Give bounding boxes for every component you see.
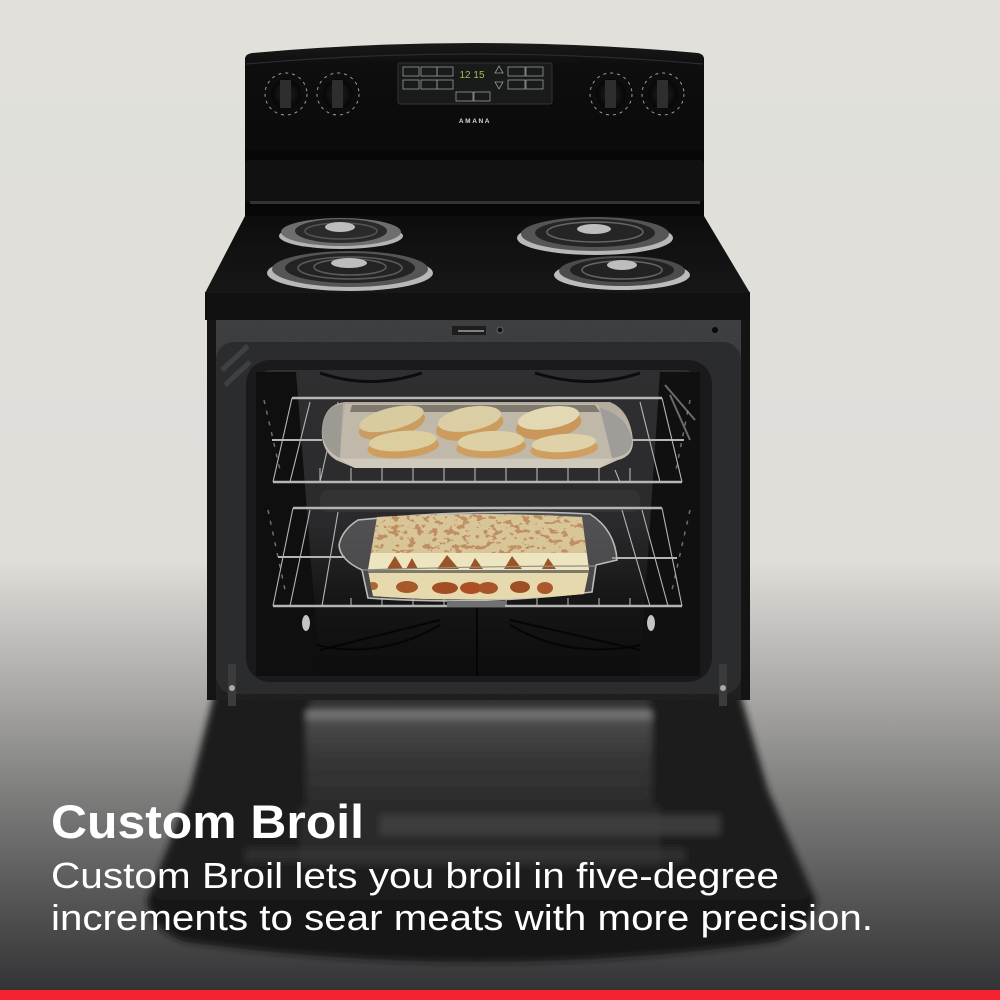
upper oven rack xyxy=(272,398,684,482)
tray xyxy=(322,402,633,468)
bread slices xyxy=(355,400,599,461)
dish rim highlight xyxy=(362,566,596,570)
front strip xyxy=(205,292,750,320)
burner front right xyxy=(554,256,690,290)
glass dish xyxy=(339,512,617,601)
knob 2 xyxy=(317,73,359,115)
headline: Custom Broil xyxy=(51,795,364,848)
latch xyxy=(452,326,718,335)
oven range xyxy=(147,43,816,962)
open oven door xyxy=(147,686,816,962)
clock readout: 12 15 xyxy=(459,70,485,81)
backguard xyxy=(245,150,704,218)
brand logo: AMANA xyxy=(459,118,491,125)
display panel xyxy=(398,63,552,104)
description xyxy=(51,855,873,938)
lower rack centre clip xyxy=(447,601,505,607)
cooktop xyxy=(205,216,750,293)
hinges xyxy=(228,664,727,706)
description: Custom Broil lets you broil in five-degree xyxy=(51,855,779,896)
knob 1 xyxy=(265,73,307,115)
lower oven rack xyxy=(273,508,682,606)
description: increments to sear meats with more precision. xyxy=(51,897,873,938)
control panel xyxy=(245,43,704,150)
burner front left xyxy=(267,251,433,291)
red footer bar xyxy=(0,990,1000,1000)
knob 4 xyxy=(642,73,684,115)
oven body frame xyxy=(207,318,750,700)
baking tray with bread xyxy=(322,400,633,468)
knob 3 xyxy=(590,73,632,115)
oven cavity xyxy=(246,360,712,682)
lasagna xyxy=(365,511,591,603)
burner rear left xyxy=(279,218,403,249)
glass dish with lasagna xyxy=(339,511,617,603)
burner rear right xyxy=(517,217,673,255)
